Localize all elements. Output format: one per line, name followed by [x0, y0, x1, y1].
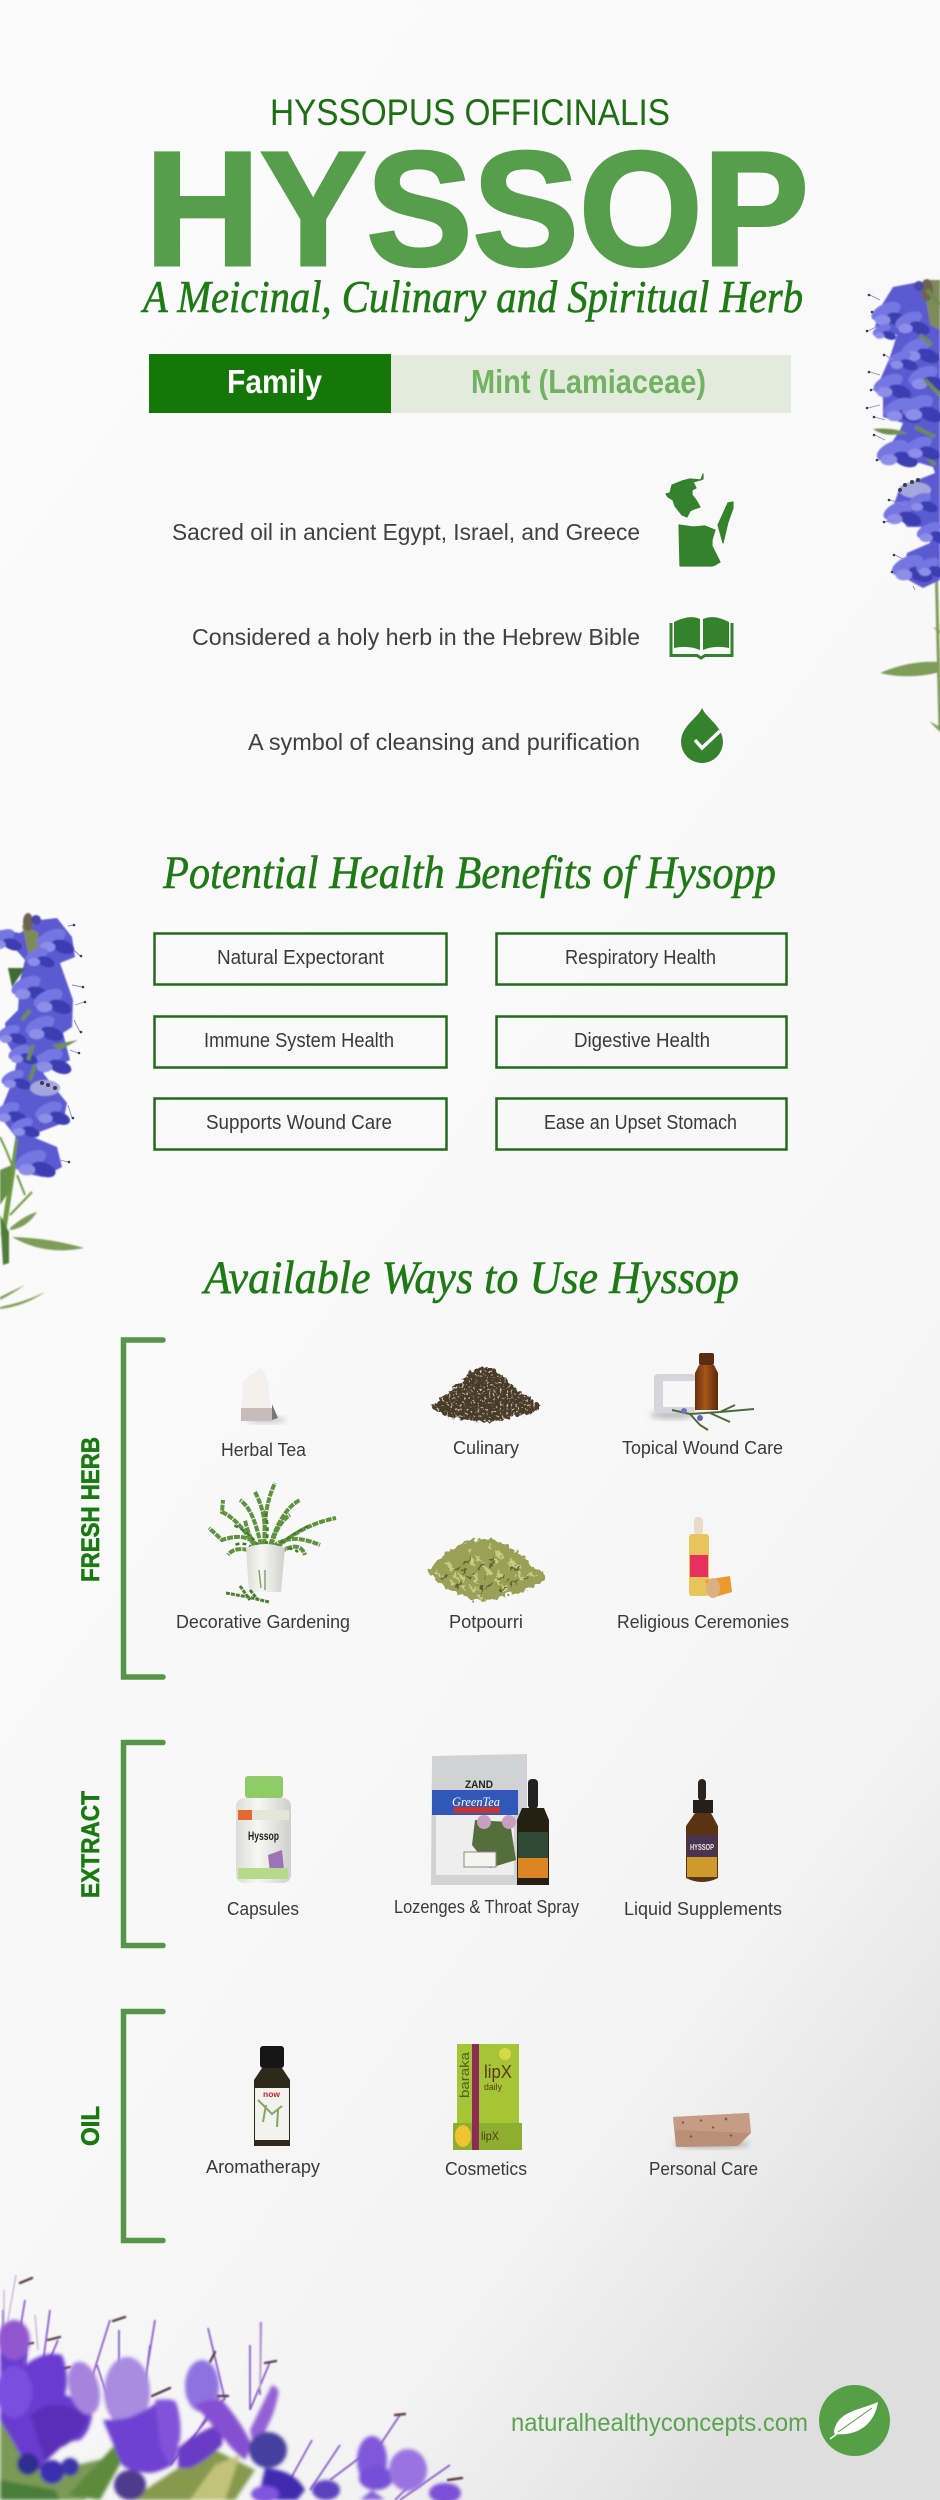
- section: oil: [77, 2012, 758, 2240]
- image: liquid supplement bottle: HYSSOP: [690, 1843, 714, 1852]
- benefit: supports wound care: Supports Wound Care: [206, 1112, 392, 1134]
- image: essential oil bottle: [254, 2046, 290, 2146]
- logo: leaf in circle: [819, 2385, 890, 2456]
- label: potpourri: Potpourri: [449, 1611, 523, 1632]
- tagline: A Meicinal, Culinary and Spiritual Herb: [140, 271, 803, 322]
- section: extract: [77, 1742, 782, 1946]
- heading: health benefits: Potential Health Benefits of Hysopp: [162, 847, 776, 899]
- image: lip balm box: lipX: [481, 2129, 499, 2143]
- fact: holy herb: Considered a holy herb in the Hebrew Bible: [192, 624, 640, 650]
- label: aromatherapy: Aromatherapy: [206, 2156, 321, 2177]
- bracket: oil: [124, 2012, 163, 2240]
- icon: map of Greece, Egypt and Israel: [666, 474, 733, 566]
- label: topical wound care: Topical Wound Care: [622, 1437, 783, 1458]
- image: lozenges bag and throat spray: ZAND: [465, 1779, 493, 1791]
- icon: drop with check mark: [681, 708, 723, 763]
- heading: ways to use: Available Ways to Use Hyssop: [201, 1252, 739, 1304]
- image: culinary herb pile: [432, 1367, 540, 1422]
- bracket: extract: [124, 1742, 163, 1946]
- image: capsule bottle: Hyssop: [248, 1831, 279, 1843]
- benefit: ease an upset stomach: Ease an Upset Stomach: [544, 1112, 737, 1134]
- image: lip balm box: lipX: [484, 2062, 512, 2082]
- family value: Mint (Lamiaceae): [471, 363, 706, 400]
- fact: sacred oil: Sacred oil in ancient Egypt, Israel, and Greece: [172, 519, 640, 545]
- website address: naturalhealthyconcepts.com: [511, 2409, 808, 2437]
- label: decorative gardening: Decorative Gardening: [176, 1611, 350, 1632]
- image: essential oil bottle: now: [263, 2090, 281, 2099]
- image: liquid supplement bottle: [686, 1779, 718, 1882]
- decoration: right hyssop sprig: [866, 279, 940, 732]
- label: personal care: Personal Care: [649, 2158, 758, 2179]
- label: culinary: Culinary: [453, 1437, 520, 1458]
- image: lozenges bag and throat spray: GreenTea: [452, 1794, 500, 1809]
- image: lip balm box: baraka: [457, 2051, 472, 2098]
- small title: scientific name: HYSSOPUS OFFICINALIS: [270, 92, 670, 133]
- family value cell: [391, 355, 791, 413]
- image: potpourri pile: [427, 1538, 545, 1600]
- label: capsules: Capsules: [227, 1898, 299, 1919]
- image: tea bag: [241, 1368, 286, 1423]
- family label: Family: [227, 363, 323, 400]
- family label cell: [149, 354, 391, 413]
- benefit: respiratory health: Respiratory Health: [565, 947, 716, 969]
- label: lozenges and throat spray: Lozenges & Throat Spray: [394, 1896, 580, 1917]
- icon: open book: [671, 617, 732, 658]
- family bar: [149, 354, 791, 413]
- label: religious ceremonies: Religious Ceremonies: [617, 1611, 789, 1632]
- bracket: fresh herb: [124, 1340, 163, 1677]
- decoration: left hyssop sprig: [0, 913, 86, 1309]
- main title: HYSSOP: [145, 117, 809, 300]
- image: lip balm box: daily: [484, 2082, 502, 2092]
- image: lip balm box: [453, 2044, 522, 2150]
- benefit: digestive health: Digestive Health: [574, 1030, 710, 1052]
- image: potted hyssop plant: [209, 1483, 336, 1602]
- benefits grid: [154, 934, 786, 1150]
- side label: fresh herb: FRESH HERB: [77, 1437, 105, 1582]
- side label: oil: OIL: [77, 2106, 105, 2146]
- benefit: immune system health: Immune System Health: [204, 1030, 394, 1052]
- image: bar of soap: [673, 2113, 751, 2148]
- fact: cleansing: A symbol of cleansing and purification: [248, 729, 640, 755]
- label: herbal tea: Herbal Tea: [221, 1439, 307, 1460]
- decoration: purple flowers bottom-left: [0, 2275, 462, 2500]
- image: topical wound care: [650, 1353, 754, 1430]
- benefit: natural expectorant: Natural Expectorant: [217, 947, 384, 969]
- image: roll-on ceremonial oil: [689, 1517, 732, 1598]
- image: lozenges bag and throat spray: [431, 1754, 549, 1885]
- image: capsule bottle: [236, 1776, 291, 1883]
- label: liquid supplements: Liquid Supplements: [624, 1898, 782, 1919]
- side label: extract: EXTRACT: [77, 1791, 105, 1898]
- label: cosmetics: Cosmetics: [445, 2158, 527, 2179]
- section: fresh herb: [77, 1340, 789, 1677]
